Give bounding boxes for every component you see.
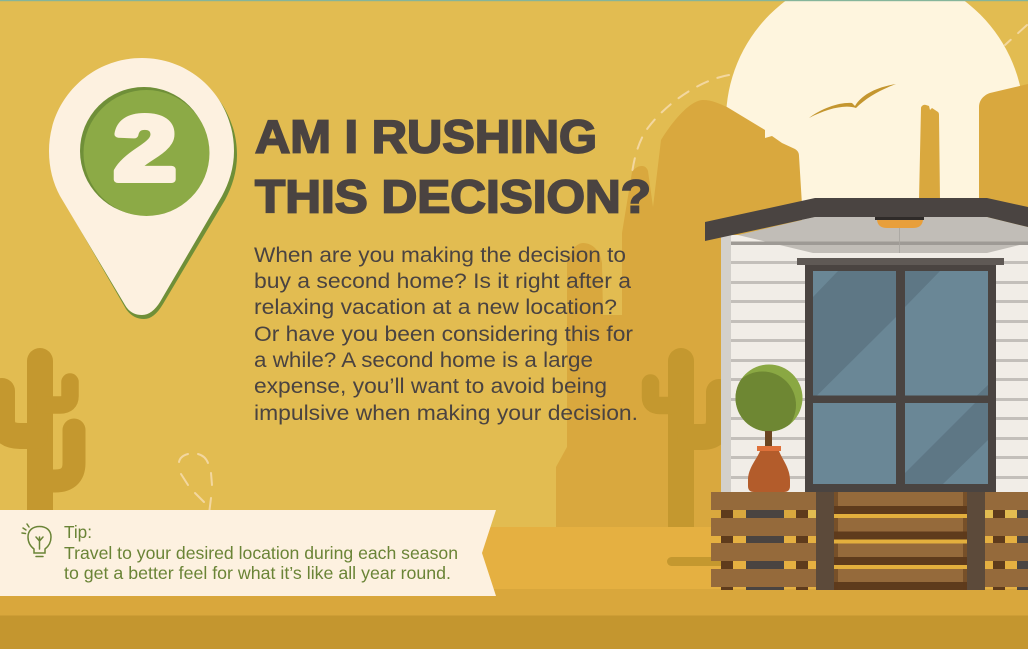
ground: light band bbox=[0, 527, 1028, 590]
location pin bbox=[49, 58, 237, 319]
house wall bbox=[731, 235, 1028, 493]
roof soffit bbox=[738, 217, 1028, 253]
porch light bbox=[875, 217, 924, 228]
soffit stripe bbox=[731, 242, 1028, 245]
pin green disc bbox=[84, 90, 210, 216]
potted plant bbox=[729, 364, 802, 492]
roof bbox=[705, 198, 1028, 241]
mountains bbox=[556, 100, 802, 527]
window bbox=[797, 258, 1004, 492]
house bbox=[705, 198, 1028, 590]
mountain: spire bbox=[919, 105, 940, 200]
tip text: Travel to your desired location during each season bbox=[64, 543, 458, 563]
ground shadow bbox=[667, 557, 727, 566]
tip text: Tip: bbox=[64, 522, 92, 542]
body text: a while? A second home is a large bbox=[254, 349, 593, 372]
body text: impulsive when making your decision. bbox=[254, 402, 638, 425]
porch steps bbox=[834, 492, 967, 590]
glass reflections bbox=[813, 271, 988, 484]
title: THIS DECISION? bbox=[255, 170, 651, 222]
body text: buy a second home? Is it right after a bbox=[254, 270, 631, 293]
fence boards bbox=[711, 492, 1028, 587]
pin shadow bbox=[52, 62, 237, 319]
tip banner bbox=[0, 510, 496, 596]
body text bbox=[254, 244, 638, 425]
left cactus bbox=[2, 361, 74, 520]
body text: Or have you been considering this for bbox=[254, 323, 633, 346]
window panes bbox=[813, 271, 988, 484]
corner post bbox=[721, 235, 731, 493]
tip text bbox=[64, 522, 458, 583]
soffit wire bbox=[898, 228, 901, 253]
body text: relaxing vacation at a new location? bbox=[254, 296, 617, 319]
top edge line bbox=[0, 0, 1028, 1]
title: AM I RUSHING bbox=[255, 110, 597, 162]
ground: dark band bbox=[0, 616, 1028, 649]
mountain: right peak bbox=[979, 84, 1028, 215]
dashed flight path: upper bbox=[632, 25, 1027, 173]
sun bbox=[726, 0, 1024, 269]
porch posts bbox=[816, 492, 985, 590]
title bbox=[255, 110, 651, 222]
siding lines bbox=[731, 261, 1028, 479]
pin dark ring bbox=[80, 87, 208, 215]
dashed flight path: loop bbox=[179, 454, 212, 510]
icon: bird bbox=[809, 84, 896, 118]
right cactus bbox=[650, 348, 719, 527]
body text: expense, you’ll want to avoid being bbox=[254, 375, 607, 398]
tip text: to get a better feel for what it’s like all year round. bbox=[64, 563, 451, 583]
number 2: 2 bbox=[114, 99, 176, 199]
window sill bbox=[797, 258, 1004, 265]
pin body bbox=[49, 58, 234, 315]
icon: light bulb bbox=[22, 524, 51, 556]
body text: When are you making the decision to bbox=[254, 244, 626, 267]
window frame bbox=[805, 264, 996, 492]
ground: middle band bbox=[0, 589, 1028, 616]
fence posts behind boards bbox=[721, 510, 1028, 590]
